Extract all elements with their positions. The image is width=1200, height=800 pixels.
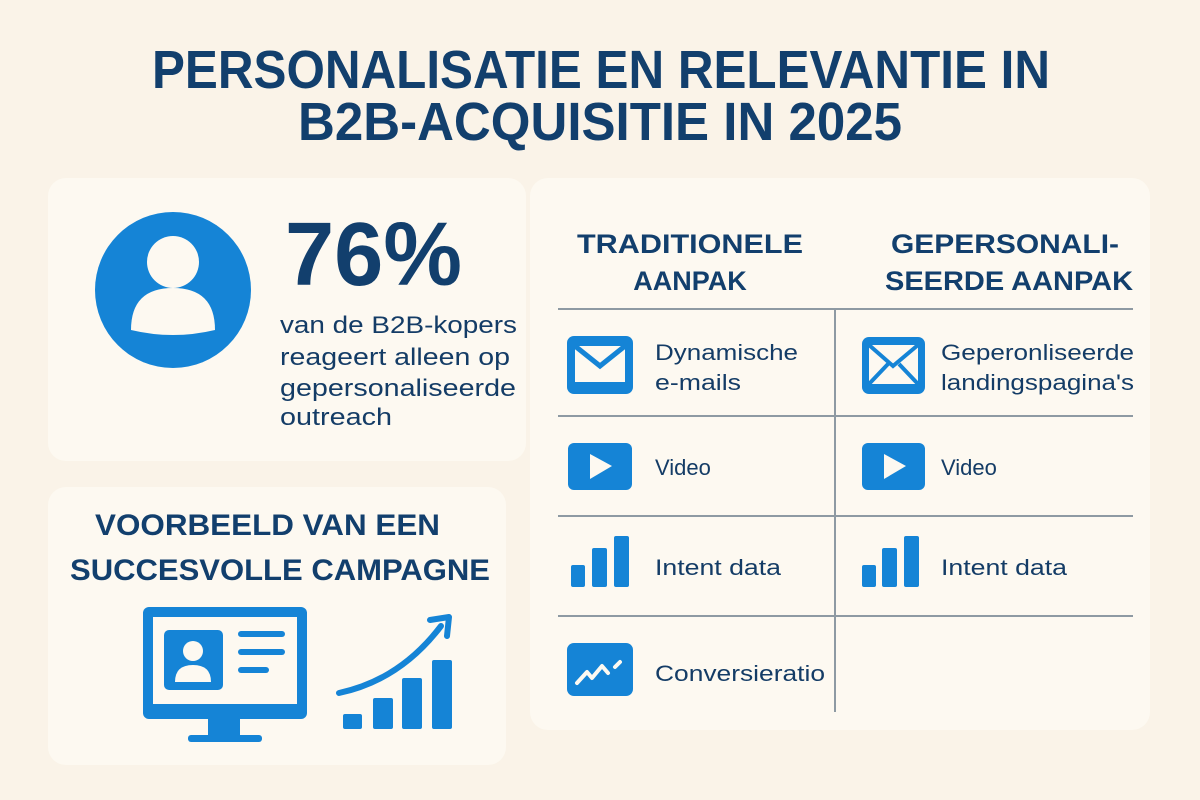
icon: monitor with profile (143, 607, 307, 742)
title (152, 40, 1050, 152)
row: video personalized (862, 443, 997, 490)
stat description: van de B2B-kopers (280, 312, 517, 339)
panel: comparison table (530, 178, 1150, 730)
icon: user circle (95, 212, 251, 368)
icon: growth chart (339, 617, 452, 729)
row: intent data personalized (862, 536, 1068, 587)
row: dynamische e-mails: Dynamische (655, 340, 798, 365)
row: video personalized: Video (941, 455, 997, 480)
stat description: gepersonaliseerde (280, 375, 516, 402)
header: gepersonaliseerde aanpak: GEPERSONALI- (891, 229, 1119, 259)
row: video traditional (568, 443, 711, 490)
header: traditionele aanpak: TRADITIONELE (577, 229, 803, 259)
header: traditionele aanpak (577, 229, 803, 296)
campaign heading: SUCCESVOLLE CAMPAGNE (70, 554, 490, 587)
header: gepersonaliseerde aanpak (885, 229, 1134, 296)
header: traditionele aanpak: AANPAK (633, 266, 747, 296)
row: gepersonaliseerde landingspagina's (862, 337, 1134, 395)
stat description: reageert alleen op (280, 344, 510, 371)
row: intent data personalized: Intent data (941, 555, 1068, 580)
stat description: outreach (280, 404, 392, 431)
header: gepersonaliseerde aanpak: SEERDE AANPAK (885, 266, 1134, 296)
stat description (280, 312, 517, 431)
stat number: 76% (285, 205, 462, 305)
campaign heading: VOORBEELD VAN EEN (95, 509, 440, 542)
row: intent data traditional: Intent data (655, 555, 782, 580)
row: dynamische e-mails: e-mails (655, 370, 741, 395)
campaign heading (70, 509, 490, 587)
row: gepersonaliseerde landingspagina's: landingspagina's (941, 370, 1134, 395)
row: dynamische e-mails (567, 336, 798, 395)
row: conversieratio: Conversieratio (655, 661, 825, 686)
row: conversieratio (567, 643, 825, 696)
row: gepersonaliseerde landingspagina's: Geperonliseerde (941, 340, 1134, 365)
title: B2B-ACQUISITIE IN 2025 (298, 92, 902, 152)
title: PERSONALISATIE EN RELEVANTIE IN (152, 40, 1050, 100)
row: video traditional: Video (655, 455, 711, 480)
panel: campaign example (48, 487, 506, 765)
panel: statistic (48, 178, 526, 461)
row: intent data traditional (571, 536, 782, 587)
